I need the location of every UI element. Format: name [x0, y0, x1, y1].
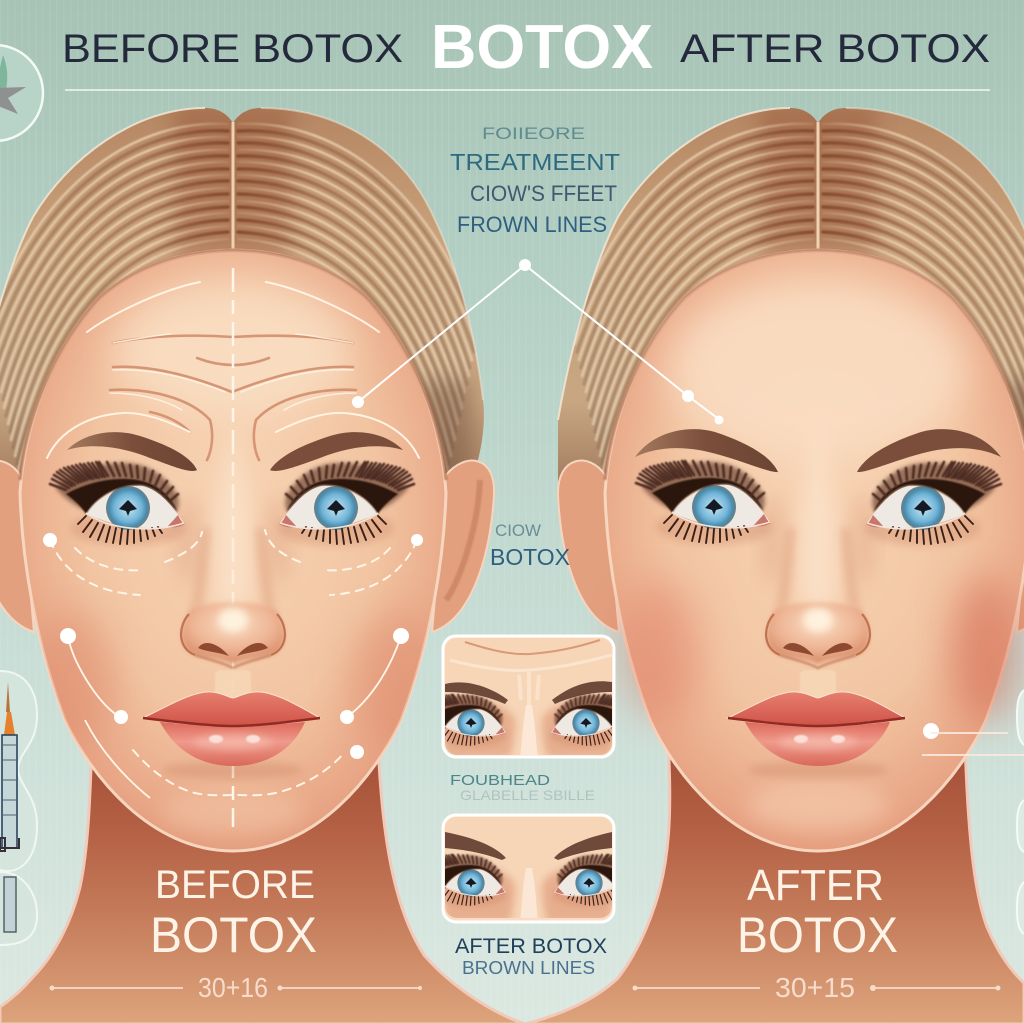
portrait caption: before botox	[150, 863, 317, 963]
footer: before: 30+16	[198, 972, 268, 1003]
centre labels	[450, 124, 620, 237]
centre labels: CIOW'S FFEET	[470, 181, 617, 206]
inset: after	[442, 814, 616, 924]
title: after botox: AFTER BOTOX	[680, 27, 990, 71]
forehead highlight	[113, 280, 353, 420]
callout: cheek markers	[922, 723, 1024, 755]
footer: after: 30+15	[775, 972, 855, 1003]
portrait caption: before botox: BEFORE	[155, 863, 315, 907]
lips	[728, 692, 905, 779]
portrait: before botox	[0, 105, 494, 851]
title: before botox: BEFORE BOTOX	[62, 27, 403, 71]
footer: before	[50, 972, 422, 1003]
eye: left	[636, 461, 772, 545]
portrait: after botox	[558, 105, 1024, 851]
centre labels: FOIIEORE	[482, 124, 585, 143]
left neck and shoulders	[0, 740, 525, 1024]
eye: right	[865, 462, 1001, 546]
mid label	[490, 521, 570, 570]
eye: right	[278, 462, 414, 546]
portrait caption: after botox	[737, 861, 898, 963]
cheek shading	[25, 495, 440, 832]
right neck and shoulders	[525, 740, 1024, 1024]
title: botox: BOTOX	[431, 13, 653, 82]
inset: before	[442, 634, 616, 758]
mid label: CIOW	[495, 521, 541, 540]
mid label: BOTOX	[490, 544, 570, 570]
portrait caption: before botox: BOTOX	[150, 907, 317, 963]
eyebrows	[67, 432, 197, 471]
callout dots	[43, 533, 423, 759]
centre labels: TREATMEENT	[450, 149, 620, 175]
inset labels: FOUBHEAD	[450, 772, 550, 789]
forehead wrinkles	[47, 282, 419, 460]
bottom centre labels	[455, 935, 607, 978]
icon: star badge	[0, 45, 43, 141]
centre labels: FROWN LINES	[457, 212, 607, 237]
callout lines to forehead and brow	[352, 259, 724, 424]
cheek blush	[618, 580, 702, 720]
lips	[143, 692, 320, 779]
under-eye and jaw dashes	[50, 530, 417, 795]
eyebrows	[635, 429, 778, 472]
footer: after	[632, 972, 1000, 1003]
portrait caption: after botox: BOTOX	[737, 907, 898, 963]
inset labels	[450, 772, 595, 803]
portrait caption: after botox: AFTER	[747, 861, 884, 910]
icon: syringe	[0, 682, 19, 932]
bottom centre labels: AFTER BOTOX	[455, 935, 607, 958]
inset labels: GLABELLE SBILLE	[460, 787, 595, 803]
nose	[181, 418, 285, 698]
nose	[766, 418, 870, 698]
eye: left	[50, 462, 186, 546]
bottom centre labels: BROWN LINES	[462, 958, 595, 978]
right edge icon panels	[1017, 690, 1024, 934]
syringe icon panels	[0, 671, 37, 945]
centre dashed line	[232, 268, 234, 827]
